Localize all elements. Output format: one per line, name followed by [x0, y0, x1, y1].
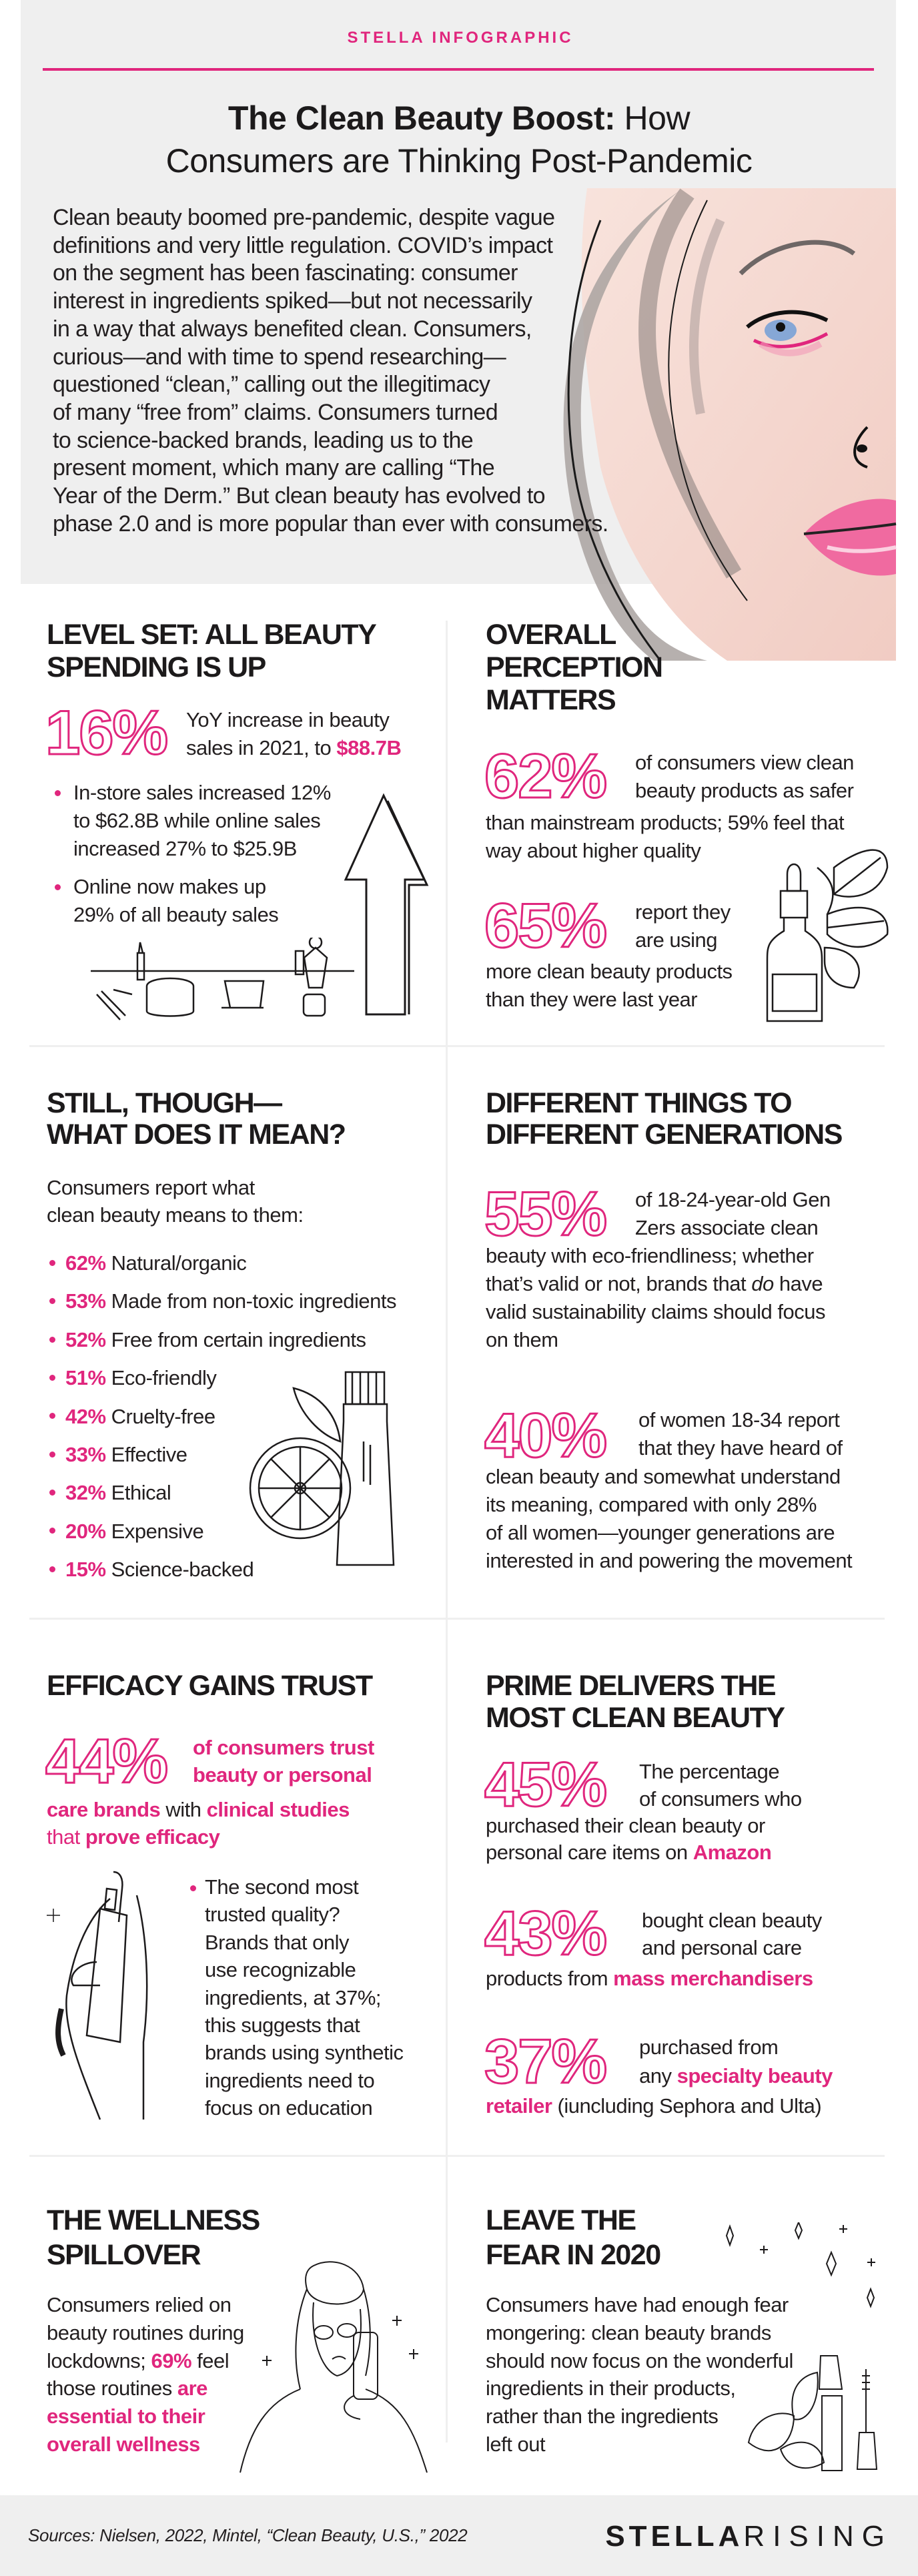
panel: level set — [45, 619, 428, 1020]
stat text: sales in 2021, to $88.7B — [186, 736, 401, 759]
heading: PERCEPTION — [486, 651, 662, 683]
icon: tube and citrus — [250, 1371, 395, 1566]
text: rather than the ingredients — [486, 2404, 718, 2428]
panel: different generations: that they have heard of — [638, 1436, 843, 1460]
panel: prime delivers: retailer (iuncluding Sephora and Ulta) — [486, 2094, 821, 2118]
panel: overall perception: are using — [635, 928, 717, 952]
stat text: YoY increase in beauty — [186, 708, 389, 731]
text: Consumers have had enough fear — [486, 2293, 789, 2316]
panel: different generations: interested in and powering the movement — [486, 1549, 852, 1572]
title — [166, 99, 752, 180]
heading — [486, 1087, 842, 1151]
heading — [47, 619, 376, 683]
bullet list: 15% Science-backed — [65, 1558, 254, 1581]
footer — [0, 2495, 918, 2576]
intro text — [53, 205, 608, 537]
stat 62%: 62% — [484, 741, 606, 811]
panel: different generations: on them — [486, 1328, 558, 1351]
bullet list: 62% Natural/organic — [65, 1251, 246, 1275]
stat 55%: 55% — [484, 1179, 606, 1249]
panel: overall perception: than mainstream products; 59% feel that — [486, 811, 844, 834]
panel: different generations: beauty with eco-friendliness; whether — [486, 1244, 814, 1267]
logo: STELLARISING — [605, 2520, 893, 2553]
intro: clean beauty means to them: — [47, 1203, 304, 1227]
panel: efficacy gains trust: focus on education — [205, 2096, 372, 2120]
intro text: interest in ingredients spiked—but not necessarily — [53, 288, 532, 314]
intro text: curious—and with time to spend researching— — [53, 344, 506, 370]
panel: prime delivers: and personal care — [642, 1936, 802, 1959]
icon: sparkles — [726, 2222, 875, 2308]
intro text: present moment, which many are calling “The — [53, 455, 494, 480]
panel: leave the fear — [486, 2204, 878, 2471]
panel: efficacy gains trust: of consumers trust — [193, 1736, 374, 1759]
heading: MATTERS — [486, 684, 615, 716]
bullet list: 32% Ethical — [65, 1481, 171, 1504]
icon: dropper bottle with leaves — [766, 849, 889, 1022]
panel: different generations: valid sustainability claims should focus — [486, 1300, 825, 1323]
stat text — [635, 751, 854, 802]
stat 45%: 45% — [484, 1749, 606, 1819]
bullet list: 33% Effective — [65, 1443, 187, 1466]
bullet list: 42% Cruelty-free — [65, 1405, 215, 1428]
panel: efficacy gains trust: brands using synthetic — [205, 2041, 403, 2064]
title: The Clean Beauty Boost: How — [228, 99, 690, 137]
text: overall wellness — [47, 2433, 200, 2456]
heading — [47, 1087, 346, 1151]
bullets: to $62.8B while online sales — [73, 809, 320, 832]
text: left out — [486, 2433, 545, 2456]
face illustration — [563, 188, 897, 661]
panel: prime delivers: bought clean beauty — [642, 1909, 822, 1932]
intro text: definitions and very little regulation. COVID’s impact — [53, 233, 552, 258]
bullet list: 53% Made from non-toxic ingredients — [65, 1289, 396, 1313]
heading: MOST CLEAN BEAUTY — [486, 1702, 785, 1734]
intro — [47, 1176, 304, 1227]
heading: SPENDING IS UP — [47, 651, 266, 683]
text: ingredients in their products, — [486, 2376, 735, 2400]
intro text: Clean beauty boomed pre-pandemic, despite vague — [53, 205, 554, 230]
icon: desk with beauty items — [91, 938, 354, 1020]
heading: LEAVE THE — [486, 2204, 636, 2236]
heading — [486, 619, 662, 716]
stat 40%: 40% — [484, 1400, 606, 1470]
panel: level set: 29% of all beauty sales — [73, 903, 278, 926]
stat 37%: 37% — [484, 2026, 606, 2096]
panel: different generations: its meaning, compared with only 28% — [486, 1493, 817, 1516]
panel: efficacy gains trust: trusted quality? — [205, 1903, 340, 1926]
panel: overall perception: report they — [635, 900, 731, 924]
panel: different generations: of all women—younger generations are — [486, 1521, 835, 1544]
bullet list: 20% Expensive — [65, 1520, 203, 1543]
intro text: questioned “clean,” calling out the illegitimacy — [53, 372, 490, 397]
panel: prime delivers: any specialty beauty — [639, 2064, 833, 2087]
stat 16%: 16% — [45, 697, 167, 767]
heading: EFFICACY GAINS TRUST — [47, 1670, 372, 1702]
heading: OVERALL — [486, 619, 616, 651]
bullets — [55, 781, 331, 926]
bullet list: 52% Free from certain ingredients — [65, 1328, 366, 1351]
panel: prime delivers: purchased their clean beauty or — [486, 1814, 765, 1837]
panel: prime delivers: personal care items on Amazon — [486, 1841, 771, 1864]
text: lockdowns; 69% feel — [47, 2349, 229, 2372]
heading: FEAR IN 2020 — [486, 2239, 660, 2271]
heading: DIFFERENT GENERATIONS — [486, 1118, 842, 1151]
icon: woman with towel and phone — [240, 2261, 428, 2473]
panel: prime delivers: purchased from — [639, 2035, 778, 2059]
panel: overall perception: more clean beauty products — [486, 960, 733, 983]
header panel background — [21, 0, 896, 584]
panel: different generations: that’s valid or not, brands that do have — [486, 1272, 823, 1295]
panel: efficacy gains trust: ingredients need to — [205, 2069, 374, 2092]
heading: LEVEL SET: ALL BEAUTY — [47, 619, 376, 651]
intro text: on the segment has been fascinating: consumer — [53, 260, 518, 286]
panel: different generations: Zers associate clean — [635, 1216, 818, 1239]
sources: Sources: Nielsen, 2022, Mintel, “Clean Beauty, U.S.,” 2022 — [28, 2525, 467, 2545]
heading: DIFFERENT THINGS TO — [486, 1087, 791, 1119]
text: mongering: clean beauty brands — [486, 2321, 771, 2344]
stat 44%: 44% — [45, 1726, 167, 1796]
heading — [47, 2204, 260, 2271]
panel: prime delivers: The percentage — [639, 1760, 779, 1783]
panel: efficacy gains trust: Brands that only — [205, 1931, 349, 1954]
panel: efficacy gains trust — [45, 1670, 403, 2120]
heading — [486, 2204, 660, 2271]
icon: hand holding serum — [47, 1871, 148, 2120]
stat 65%: 65% — [484, 890, 606, 960]
panel: overall perception: than they were last year — [486, 988, 697, 1011]
panel: efficacy gains trust: The second most — [205, 1875, 358, 1899]
icon: mascara and leaves — [747, 2355, 878, 2471]
panel: efficacy gains trust: use recognizable — [205, 1958, 356, 1981]
panel: efficacy gains trust: this suggests that — [205, 2013, 360, 2037]
intro text: Year of the Derm.” But clean beauty has evolved to — [53, 483, 545, 509]
intro: Consumers report what — [47, 1176, 255, 1199]
text: those routines are — [47, 2376, 207, 2400]
intro text: of many “free from” claims. Consumers turned — [53, 400, 498, 425]
panel: efficacy gains trust: ingredients, at 37%; — [205, 1986, 381, 2009]
text: beauty routines during — [47, 2321, 244, 2344]
heading: WHAT DOES IT MEAN? — [47, 1118, 346, 1151]
intro text: to science-backed brands, leading us to the — [53, 428, 473, 453]
bullets: increased 27% to $25.9B — [73, 837, 297, 860]
panel: overall perception: way about higher quality — [486, 839, 701, 862]
eyebrow label: STELLA INFOGRAPHIC — [347, 29, 574, 47]
dividers — [446, 621, 448, 2443]
panel: prime delivers: of consumers who — [639, 1787, 802, 1811]
bullets: In-store sales increased 12% — [73, 781, 331, 804]
panel: different generations: of women 18-34 report — [638, 1408, 839, 1431]
heading — [486, 1670, 785, 1734]
panel: overall perception — [484, 619, 889, 1022]
panel: different generations: clean beauty and somewhat understand — [486, 1465, 841, 1488]
panel: what does it mean — [47, 1087, 396, 1581]
panel: prime delivers: products from mass merchandisers — [486, 1967, 813, 1990]
text: should now focus on the wonderful — [486, 2349, 793, 2372]
title: Consumers are Thinking Post-Pandemic — [166, 142, 752, 180]
panel: efficacy gains trust: care brands with clinical studies — [47, 1798, 350, 1821]
panel: prime delivers — [484, 1670, 833, 2118]
panel: different generations — [484, 1087, 853, 1572]
text: essential to their — [47, 2404, 205, 2428]
text — [486, 2293, 793, 2456]
heading: PRIME DELIVERS THE — [486, 1670, 775, 1702]
intro text: in a way that always benefited clean. Consumers, — [53, 316, 532, 342]
stat 43%: 43% — [484, 1898, 606, 1968]
heading: THE WELLNESS — [47, 2204, 260, 2236]
icon: arrow up — [344, 793, 428, 1016]
stat text: beauty products as safer — [635, 779, 853, 802]
panel: efficacy gains trust: that prove efficacy — [47, 1825, 219, 1849]
bullet list: 51% Eco-friendly — [65, 1366, 216, 1389]
bullet — [190, 1885, 196, 1891]
stat text — [186, 708, 401, 759]
heading: STILL, THOUGH— — [47, 1087, 282, 1119]
panel: wellness spillover — [47, 2204, 428, 2473]
bullets: Online now makes up — [73, 875, 266, 898]
bullet list — [49, 1251, 396, 1581]
text — [47, 2293, 244, 2456]
stat text: of consumers view clean — [635, 751, 854, 774]
text: Consumers relied on — [47, 2293, 232, 2316]
panel: different generations: of 18-24-year-old Gen — [635, 1188, 831, 1211]
heading: SPILLOVER — [47, 2239, 200, 2271]
intro text: phase 2.0 and is more popular than ever with consumers. — [53, 511, 608, 537]
panel: efficacy gains trust: beauty or personal — [193, 1763, 372, 1787]
